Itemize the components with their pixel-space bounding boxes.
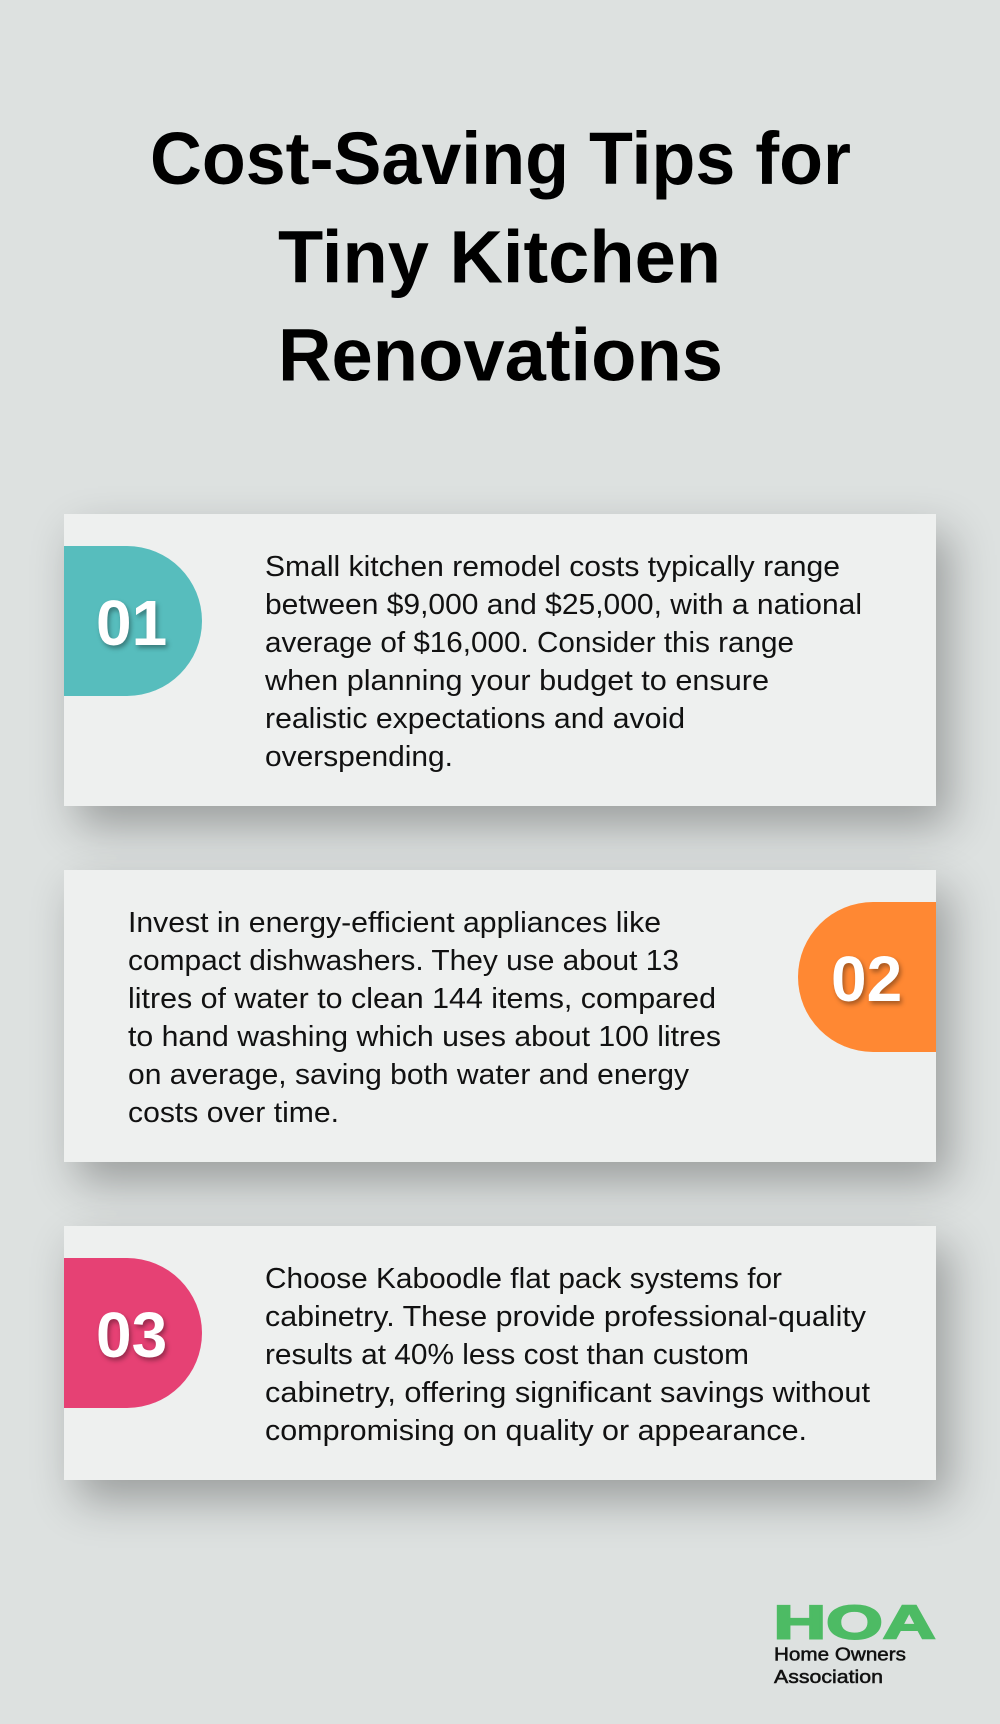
text: tip 03 body: compromising on quality or appearance.	[265, 1415, 807, 1447]
text: tip 01 body: Small kitchen remodel costs typically range	[265, 550, 840, 582]
logo tagline	[774, 1644, 906, 1687]
text: tip 03 body	[265, 1263, 870, 1447]
text: tip 03 body: cabinetry. These provide professional-quality	[265, 1301, 867, 1333]
text: tip 02 body: litres of water to clean 144 items, compared	[128, 982, 716, 1014]
title: Renovations	[278, 313, 723, 396]
text: tip 03 body: results at 40% less cost than custom	[265, 1339, 749, 1371]
text: tip 01 body: between $9,000 and $25,000, with a national	[265, 588, 862, 620]
text: tip 02 body: on average, saving both water and energy	[128, 1058, 690, 1090]
number 03: 03	[96, 1299, 167, 1371]
text: tip 01 body: when planning your budget to ensure	[264, 664, 769, 696]
logo: HOA Home Owners Association	[774, 1596, 936, 1687]
title	[150, 116, 851, 396]
number 01: 01	[96, 587, 167, 659]
text: tip 01 body	[264, 550, 862, 772]
badge: 01	[64, 546, 202, 696]
badge: 03	[64, 1258, 202, 1408]
panel: tip 03	[64, 1226, 936, 1480]
text: tip 02 body: costs over time.	[128, 1096, 339, 1128]
logo tagline: Home Owners	[774, 1644, 906, 1665]
logo tagline: Association	[774, 1666, 883, 1687]
logo wordmark HOA: HOA	[774, 1596, 936, 1648]
text: tip 02 body: Invest in energy-efficient appliances like	[128, 906, 661, 938]
badge: 02	[798, 902, 936, 1052]
text: tip 02 body: compact dishwashers. They use about 13	[128, 944, 679, 976]
text: tip 02 body	[128, 906, 721, 1128]
text: tip 01 body: average of $16,000. Consider this range	[265, 626, 794, 658]
panel: tip 02	[64, 870, 936, 1162]
text: tip 03 body: Choose Kaboodle flat pack systems for	[265, 1263, 782, 1295]
text: tip 01 body: realistic expectations and avoid	[265, 702, 685, 734]
title: Tiny Kitchen	[278, 215, 721, 298]
number 02: 02	[831, 943, 902, 1015]
panel: tip 01	[64, 514, 936, 806]
text: tip 01 body: overspending.	[265, 740, 453, 772]
text: tip 03 body: cabinetry, offering significant savings without	[265, 1377, 870, 1409]
text: tip 02 body: to hand washing which uses about 100 litres	[128, 1020, 721, 1052]
title: Cost-Saving Tips for	[150, 116, 851, 200]
